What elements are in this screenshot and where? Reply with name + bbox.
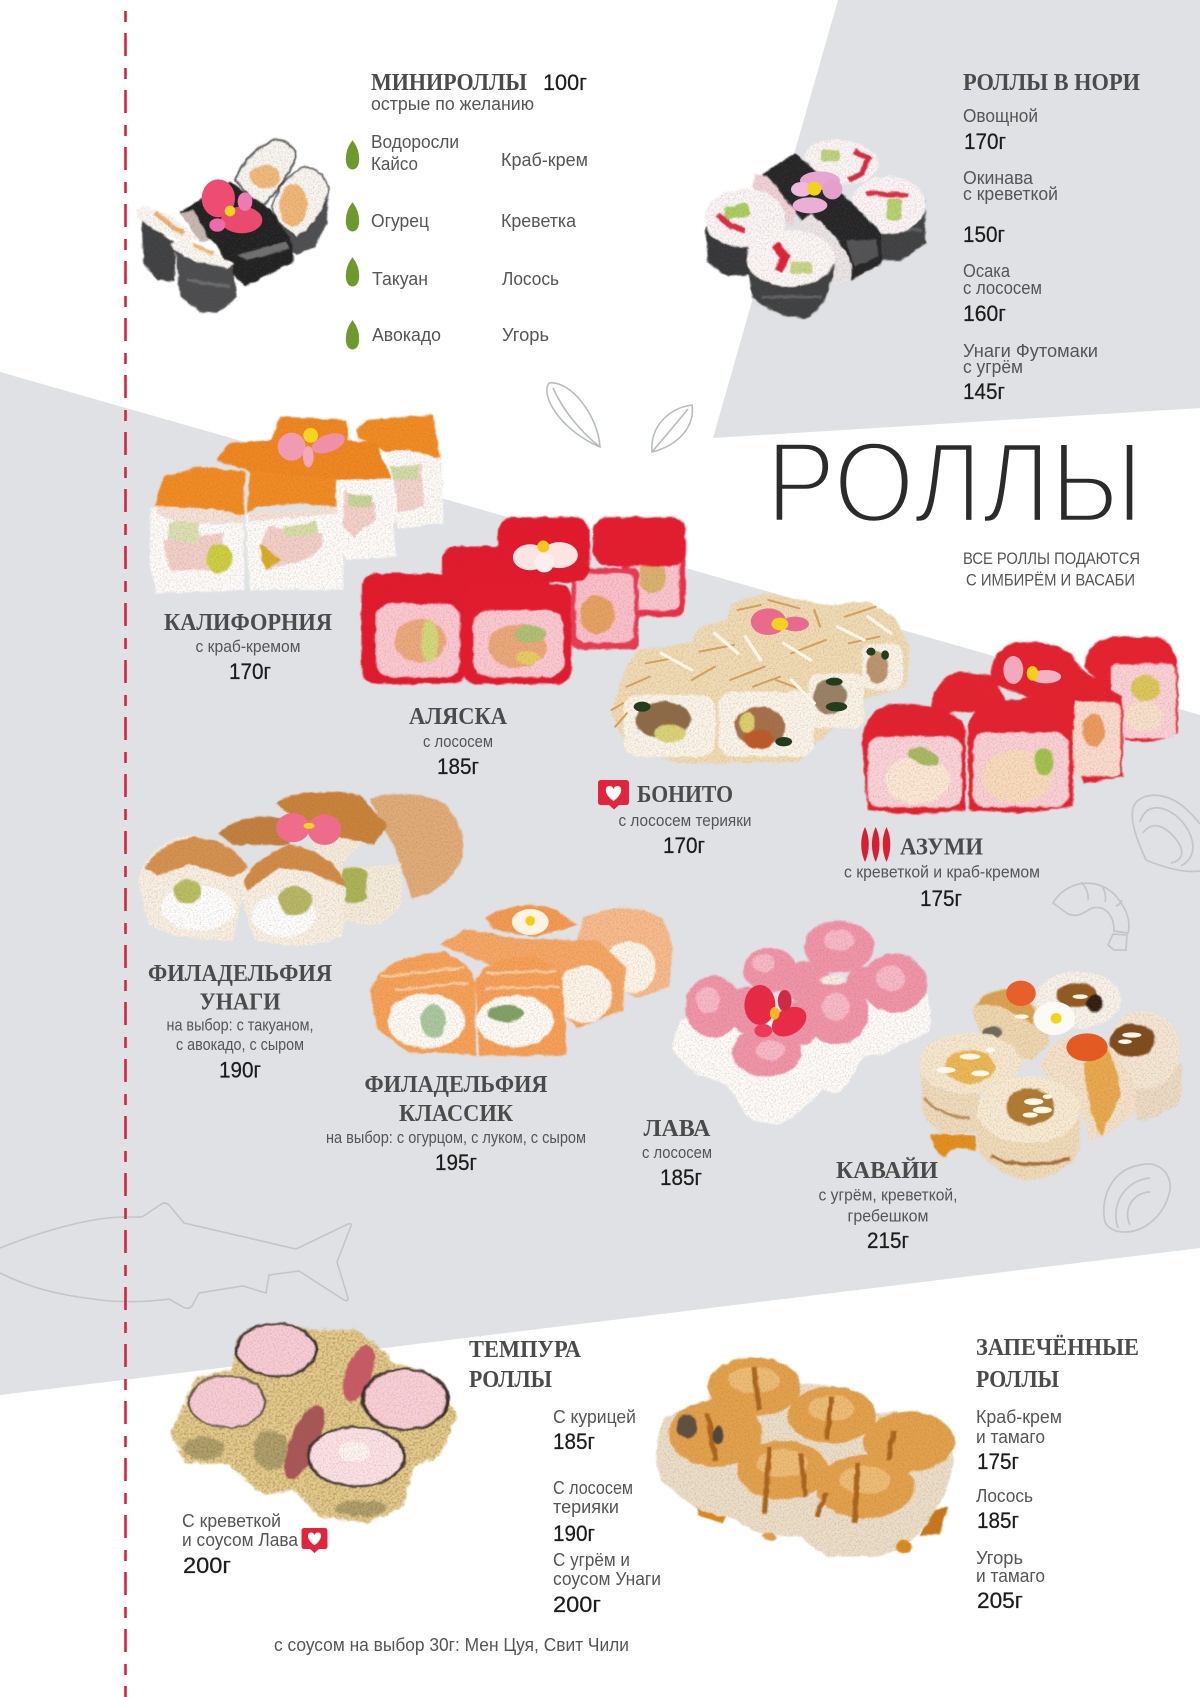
note: served with ginger and wasabi: С ИМБИРЁМ И ВАСАБИ <box>966 572 1135 590</box>
item: salmon teriyaki <box>553 1478 633 1546</box>
heading: mini rolls: МИНИРОЛЛЫ <box>371 70 527 96</box>
item: seaweed: Водоросли <box>371 132 459 152</box>
icon: chili peppers <box>861 827 890 862</box>
heading: baked rolls: ЗАПЕЧЁННЫЕ <box>976 1335 1139 1361</box>
label: philadelphia classic: 195г <box>435 1150 477 1175</box>
label: alaska: АЛЯСКА <box>409 704 508 730</box>
icon: leaf outline right <box>652 405 692 452</box>
item: crab cream: Краб-крем <box>501 150 588 170</box>
panel: grey central band <box>0 372 1200 1395</box>
photo: baked rolls <box>656 1357 955 1557</box>
item: takuan: Такуан <box>372 269 428 289</box>
item: kaiso: Кайсо <box>371 154 418 174</box>
heading: tempura rolls <box>469 1337 582 1393</box>
item: avocado: Авокадо <box>372 325 441 345</box>
item: shrimp lava sauce: С креветкой <box>182 1511 281 1531</box>
label: philadelphia unagi: УНАГИ <box>200 990 281 1016</box>
panel: grey top-right wedge <box>713 0 1200 438</box>
label: lava: ЛАВА <box>644 1116 711 1142</box>
photo: philadelphia classic roll <box>370 905 672 1055</box>
photo: bonito roll <box>611 593 910 763</box>
item: eel unagi sauce: 200г <box>553 1592 601 1617</box>
label: bonito: с лососем терияки <box>618 811 752 830</box>
label: lava: с лососем <box>642 1143 712 1162</box>
note: served with ginger and wasabi: ВСЕ РОЛЛЫ ПОДАЮТСЯ <box>963 550 1140 568</box>
item: chicken: 185г <box>553 1429 595 1454</box>
label: philadelphia unagi: с авокадо, с сыром <box>176 1035 304 1054</box>
item: shrimp lava sauce: 200г <box>183 1553 231 1578</box>
item: eel unagi sauce: соусом Унаги <box>553 1569 661 1589</box>
label: philadelphia unagi: 190г <box>219 1058 261 1082</box>
icon: leaf outline left <box>547 383 600 447</box>
subtitle: острые по желанию <box>371 94 534 114</box>
label: bonito: БОНИТО <box>637 782 733 808</box>
price: 145г <box>963 379 1005 404</box>
photo: kawai roll <box>919 971 1182 1180</box>
label: california: 170г <box>229 659 271 684</box>
photo: tempura rolls <box>170 1323 457 1523</box>
heading: nori rolls: РОЛЛЫ В НОРИ <box>963 70 1140 96</box>
section: mini rolls text <box>346 70 588 349</box>
label: azumi: АЗУМИ <box>900 834 983 860</box>
photo: alaska roll <box>361 517 686 684</box>
item: eel tamago <box>976 1548 1045 1613</box>
item: salmon: Лосось <box>502 269 559 289</box>
weight: 100г <box>543 70 587 95</box>
photo: philadelphia unagi roll <box>139 791 463 946</box>
note: served with ginger and wasabi <box>963 550 1140 590</box>
item: osaka: Осака <box>963 261 1011 281</box>
icon: heart badge <box>598 780 629 810</box>
photo: mini rolls <box>135 140 329 313</box>
item: eel: Угорь <box>502 325 549 345</box>
item: vegetable: Овощной <box>963 106 1038 126</box>
icon: small heart badge <box>302 1528 328 1553</box>
item: salmon teriyaki: 190г <box>553 1521 595 1546</box>
photo: lava roll <box>672 921 931 1125</box>
label: kawai: КАВАЙИ <box>836 1158 938 1184</box>
photo: nori rolls <box>704 135 926 318</box>
dashed red vertical line <box>124 0 127 1697</box>
item: chicken <box>553 1407 636 1454</box>
item: crab tamago: 175г <box>977 1449 1019 1474</box>
item: salmon teriyaki: терияки <box>553 1497 619 1517</box>
label: azumi: с креветкой и краб-кремом <box>844 862 1040 882</box>
icon: fish outline <box>0 1203 351 1308</box>
label: alaska: 185г <box>437 754 479 779</box>
item: shrimp: Креветка <box>501 211 577 231</box>
label: philadelphia unagi: на выбор: с такуаном, <box>166 1016 314 1034</box>
label: philadelphia classic <box>326 1072 586 1175</box>
label: bonito <box>598 780 752 858</box>
item: crab tamago: и тамаго <box>976 1427 1045 1447</box>
section: nori rolls text <box>963 70 1140 404</box>
item: unagi futomaki: Унаги Футомаки <box>963 341 1098 361</box>
label: bonito: 170г <box>663 833 705 858</box>
label: philadelphia unagi <box>148 961 332 1082</box>
footnote: sauce option: с соусом на выбор 30г: Мен Цуя, Свит Чили <box>274 1635 629 1655</box>
section: tempura text <box>182 1337 661 1617</box>
label: kawai <box>818 1158 958 1253</box>
section: baked rolls text <box>976 1335 1139 1613</box>
label: philadelphia unagi: ФИЛАДЕЛЬФИЯ <box>148 961 332 987</box>
photo: azumi roll <box>862 637 1178 815</box>
price: 170г <box>964 129 1006 154</box>
photo: california roll <box>150 415 443 593</box>
item: crab tamago: Краб-крем <box>976 1407 1062 1427</box>
label: lava: 185г <box>660 1165 702 1190</box>
icon: shrimp outline <box>1053 882 1129 950</box>
price: 160г <box>963 301 1006 326</box>
item: salmon teriyaki: С лососем <box>553 1478 633 1498</box>
heading: baked rolls: РОЛЛЫ <box>976 1367 1059 1393</box>
item: unagi sub: с угрём <box>963 357 1023 377</box>
heading: tempura rolls: ТЕМПУРА <box>469 1337 582 1363</box>
item: okinawa: Окинава <box>963 168 1034 188</box>
label: california: с краб-кремом <box>196 637 300 656</box>
item: eel unagi sauce: С угрём и <box>553 1550 630 1570</box>
icon: shell outline top <box>1132 795 1200 871</box>
icon: green leaves <box>346 141 359 349</box>
item: salmon: 185г <box>977 1508 1019 1533</box>
label: kawai: гребешком <box>848 1206 928 1226</box>
item: eel tamago: и тамаго <box>976 1566 1045 1586</box>
item: salmon: Лосось <box>976 1486 1033 1506</box>
label: california <box>164 610 332 684</box>
label: philadelphia classic: на выбор: с огурцом, с луком, с сыром <box>326 1128 586 1147</box>
item: osaka sub: с лососем <box>963 278 1042 298</box>
label: azumi <box>844 827 1040 911</box>
item: eel tamago: Угорь <box>976 1548 1023 1568</box>
item: eel tamago: 205г <box>977 1588 1023 1613</box>
label: california: КАЛИФОРНИЯ <box>164 610 332 636</box>
label: alaska <box>409 704 508 779</box>
label: philadelphia classic: ФИЛАДЕЛЬФИЯ <box>364 1072 548 1098</box>
heading: tempura rolls: РОЛЛЫ <box>469 1367 552 1393</box>
item: crab tamago <box>976 1407 1062 1474</box>
label: alaska: с лососем <box>423 732 493 751</box>
title: rolls: РОЛЛЫ <box>766 419 1143 547</box>
label: philadelphia classic: КЛАССИК <box>399 1101 514 1127</box>
label: azumi: 175г <box>920 886 962 911</box>
item: cucumber: Огурец <box>371 211 429 231</box>
label: lava <box>642 1116 712 1190</box>
label: kawai: 215г <box>867 1228 909 1253</box>
item: shrimp lava sauce: и соусом Лава <box>182 1530 299 1550</box>
item: chicken: С курицей <box>553 1407 636 1427</box>
item: shrimp lava sauce <box>182 1511 299 1578</box>
price: 150г <box>963 222 1005 247</box>
label: kawai: с угрём, креветкой, <box>818 1186 958 1204</box>
item: salmon <box>976 1486 1033 1533</box>
heading: baked rolls <box>976 1335 1139 1393</box>
item: eel unagi sauce <box>553 1550 661 1617</box>
item: okinawa sub: с креветкой <box>963 184 1058 204</box>
icon: shell outline bottom <box>1104 1164 1170 1232</box>
